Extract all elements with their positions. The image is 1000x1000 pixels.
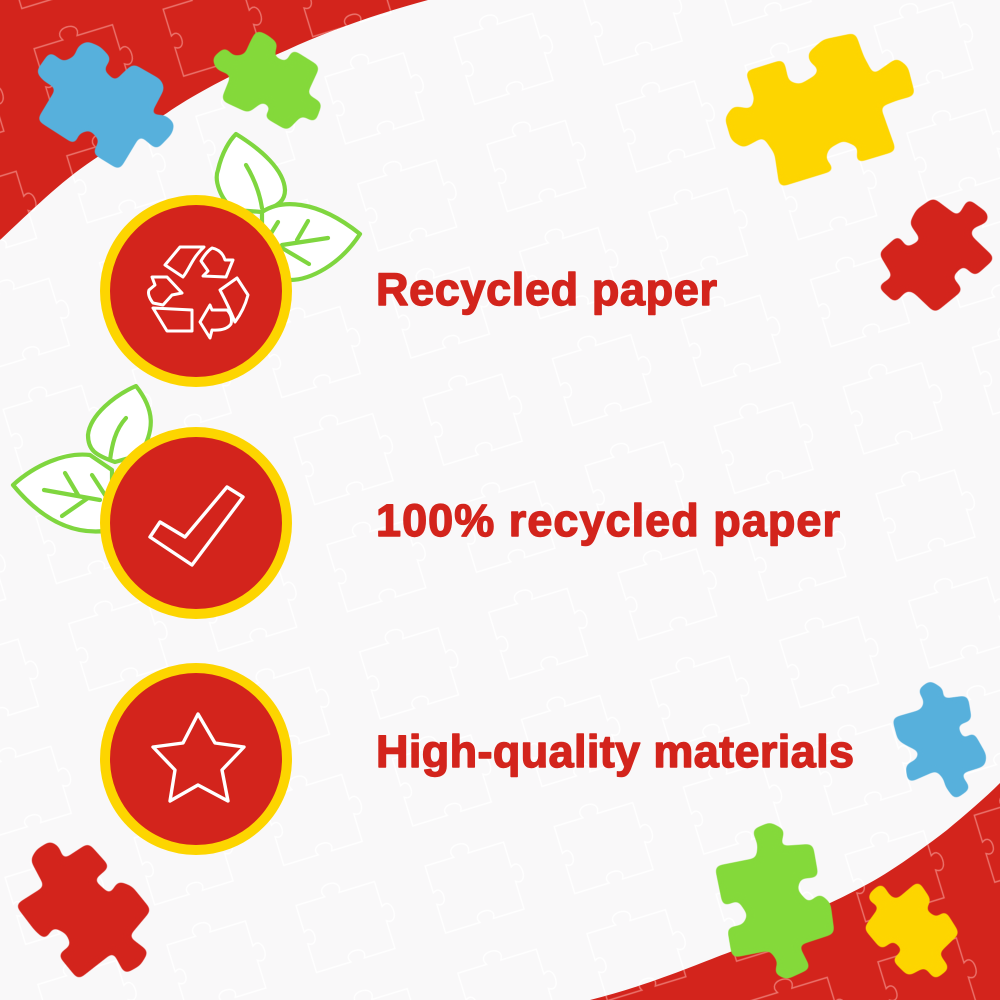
text: recycled paper: Recycled paper	[376, 264, 717, 315]
puzzle piece: blue top left	[37, 42, 174, 169]
red curved corner: top left	[0, 0, 428, 240]
puzzle piece: yellow top right	[725, 33, 915, 187]
puzzle piece: red right	[878, 198, 994, 312]
text: 100% recycled paper: 100% recycled paper	[376, 495, 840, 546]
puzzle piece: blue right	[893, 681, 986, 799]
icon: check mark	[150, 487, 243, 565]
puzzle piece: green bottom	[715, 823, 834, 979]
red curved corner: bottom right	[590, 783, 1000, 1000]
icon: star	[153, 714, 244, 801]
icon: leaves behind second badge	[13, 386, 151, 532]
badge: recycle icon	[105, 200, 287, 382]
text: high-quality materials: High-quality materials	[376, 726, 854, 777]
puzzle piece: green top	[213, 31, 322, 130]
badge: star icon	[105, 668, 287, 850]
badge: check mark icon	[105, 432, 287, 614]
puzzle piece: yellow bottom	[864, 882, 959, 979]
puzzle piece: red bottom left	[16, 842, 151, 979]
icon: recycle arrows	[148, 247, 248, 338]
icon: leaves behind first badge	[217, 134, 360, 280]
